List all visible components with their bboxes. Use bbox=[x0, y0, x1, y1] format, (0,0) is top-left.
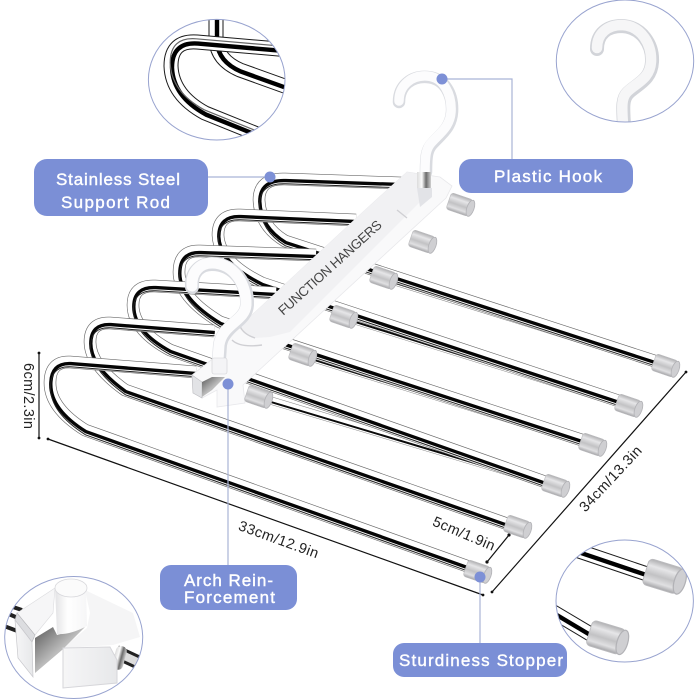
callout: stainless steel support rod bbox=[34, 159, 276, 216]
dimension: length 33cm: 33cm/12.9in bbox=[236, 518, 321, 562]
dimension: width 34cm: 34cm/13.3in bbox=[577, 443, 646, 515]
detail circle: stopper close-up bbox=[550, 540, 693, 662]
callout: arch reinforcement: Arch Rein- bbox=[184, 571, 273, 590]
hanger: front hook bbox=[192, 263, 247, 374]
dimension: height 6cm bbox=[20, 352, 40, 439]
hanger: stainless steel rods bbox=[50, 179, 671, 575]
dimension: length 33cm bbox=[47, 438, 484, 596]
callout: stainless steel support rod: Support Rod bbox=[61, 193, 170, 212]
callout: stainless steel support rod: Stainless Steel bbox=[56, 170, 180, 189]
callout: sturdiness stopper bbox=[393, 572, 567, 677]
hanger: rear hook bbox=[399, 76, 452, 207]
dimension: width 34cm bbox=[491, 371, 687, 593]
hanger: outer stoppers bbox=[463, 354, 682, 585]
detail circle: plastic hook close-up bbox=[556, 0, 694, 125]
callout: arch reinforcement: Forcement bbox=[184, 588, 275, 607]
callout: plastic hook: Plastic Hook bbox=[494, 167, 602, 186]
detail circle: support rod close-up bbox=[148, 10, 291, 140]
hanger: inner stoppers bbox=[244, 193, 477, 410]
callout: plastic hook bbox=[436, 74, 633, 193]
dimension: height 6cm: 6cm/2.3in bbox=[20, 363, 36, 429]
bar text: FUNCTION HANGERS bbox=[275, 217, 385, 318]
hanger: inner stopper rods bbox=[259, 278, 666, 487]
callout: sturdiness stopper: Sturdiness Stopper bbox=[399, 651, 563, 670]
hanger: plastic bar bbox=[192, 172, 452, 407]
dimension: spacing 5cm: 5cm/1.9in bbox=[430, 514, 497, 555]
detail circle: arch reinforcement close-up bbox=[4, 576, 146, 698]
dimension: spacing 5cm bbox=[430, 514, 511, 564]
callout: arch reinforcement bbox=[160, 378, 297, 610]
